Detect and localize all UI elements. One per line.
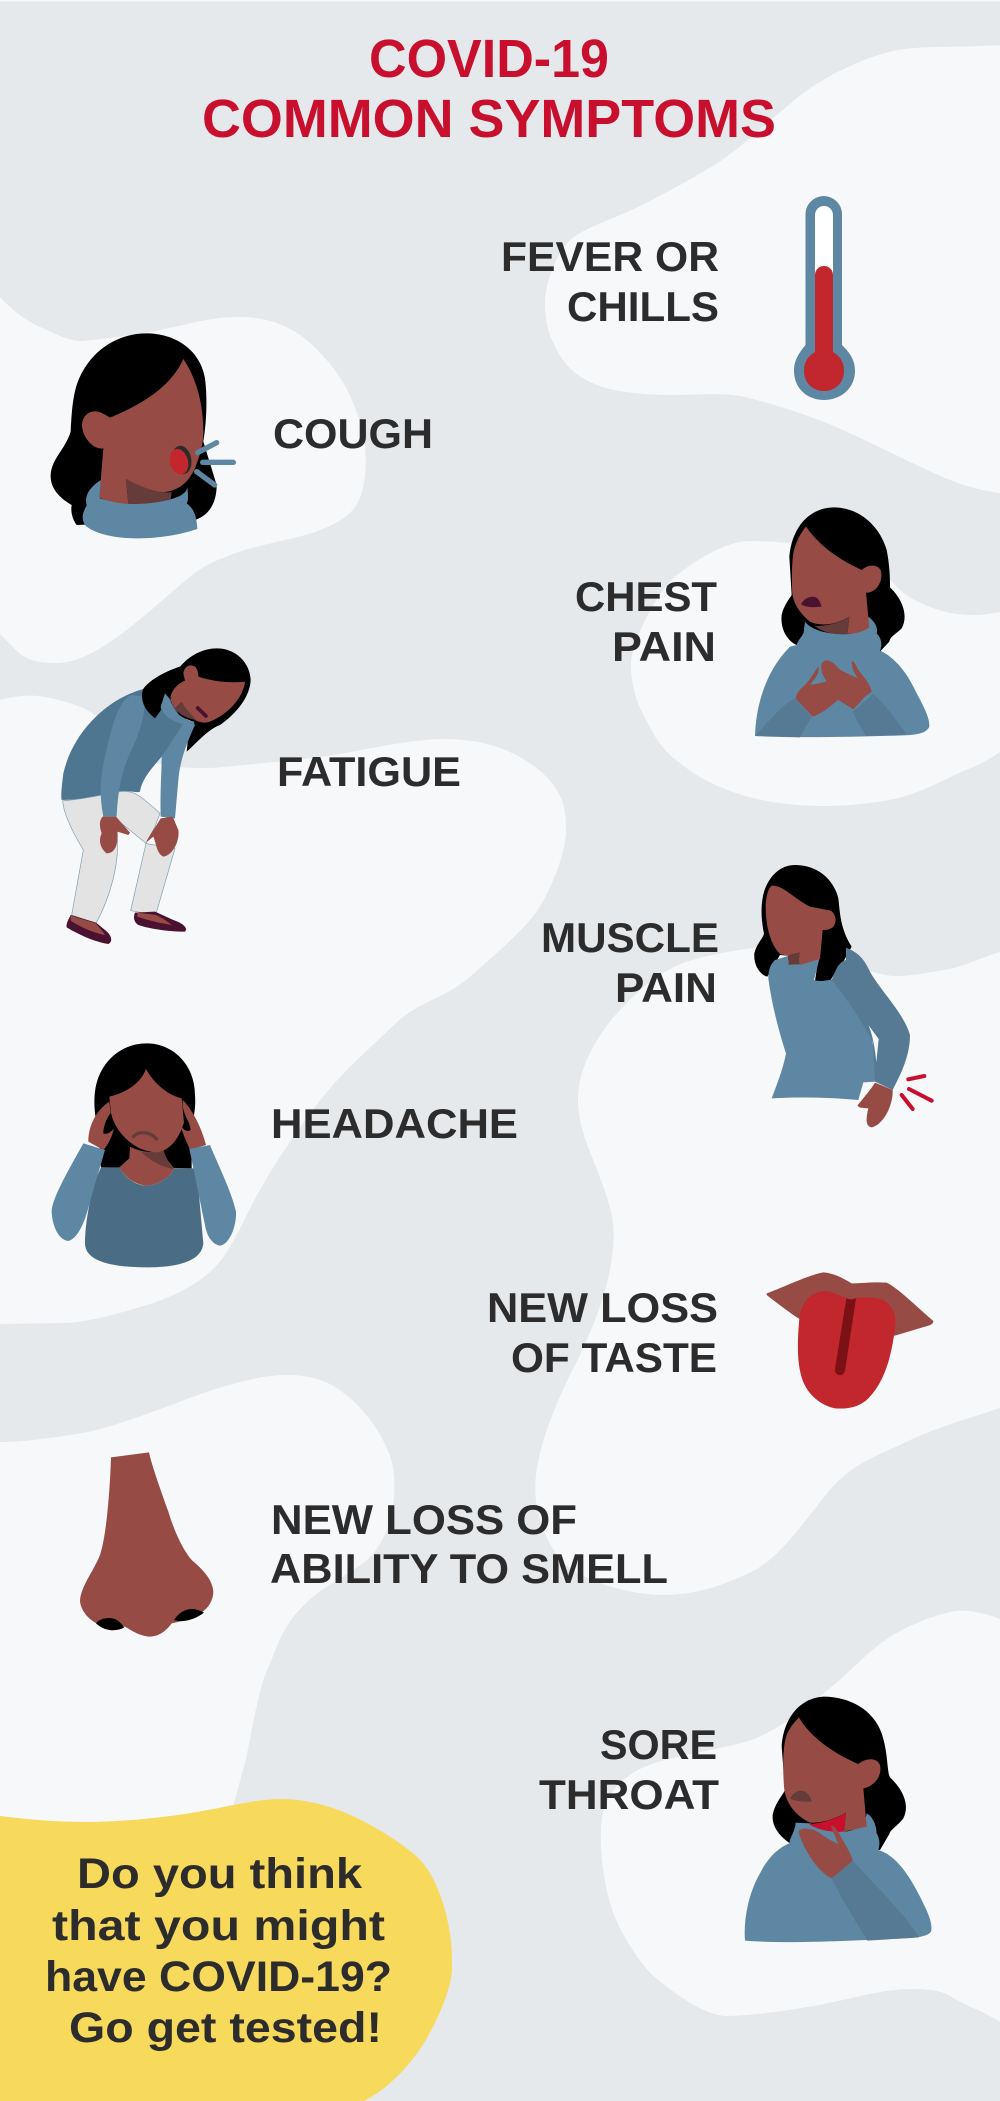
label: new loss of taste — [487, 1284, 718, 1381]
label: fever or chills: CHILLS — [567, 283, 719, 330]
title: COVID-19 — [369, 29, 609, 89]
label: fever or chills: FEVER OR — [501, 233, 719, 280]
figure: coughing woman — [51, 333, 233, 538]
callout: go get tested: have COVID-19? — [45, 1953, 392, 2001]
label: new loss of ability to smell — [270, 1496, 668, 1592]
figure: woman with headache — [52, 1043, 236, 1267]
label: chest pain: CHEST — [575, 573, 717, 620]
label: new loss of ability to smell: ABILITY TO SMELL — [270, 1545, 668, 1592]
label: muscle pain — [541, 914, 719, 1011]
callout: go get tested: Do you think — [77, 1850, 362, 1898]
label: new loss of taste: NEW LOSS — [487, 1284, 718, 1331]
label: fatigue: FATIGUE — [277, 748, 461, 795]
callout: go get tested — [0, 1799, 452, 2101]
label: sore throat — [539, 1721, 719, 1818]
label: chest pain: PAIN — [612, 623, 716, 670]
figure: woman with sore throat — [745, 1697, 931, 1942]
title — [202, 29, 776, 149]
label: cough: COUGH — [273, 410, 433, 457]
label: chest pain — [575, 573, 717, 670]
figure: woman with muscle pain — [754, 865, 932, 1127]
icon: thermometer — [794, 196, 855, 400]
icon: tongue — [767, 1272, 933, 1409]
label: headache: HEADACHE — [271, 1100, 518, 1147]
label: muscle pain: MUSCLE — [541, 914, 719, 961]
figure: woman with chest pain — [755, 507, 929, 737]
callout: go get tested: that you might — [52, 1902, 385, 1950]
label: new loss of taste: OF TASTE — [511, 1334, 717, 1381]
figure: tired woman bending over — [61, 648, 251, 944]
label: new loss of ability to smell: NEW LOSS OF — [271, 1496, 577, 1543]
label: sore throat: THROAT — [539, 1771, 719, 1818]
label: fever or chills — [501, 233, 719, 330]
icon: nose — [80, 1452, 213, 1637]
title: COMMON SYMPTOMS — [202, 89, 776, 149]
label: muscle pain: PAIN — [615, 964, 717, 1011]
label: sore throat: SORE — [600, 1721, 717, 1768]
callout: go get tested: Go get tested! — [69, 2004, 382, 2052]
